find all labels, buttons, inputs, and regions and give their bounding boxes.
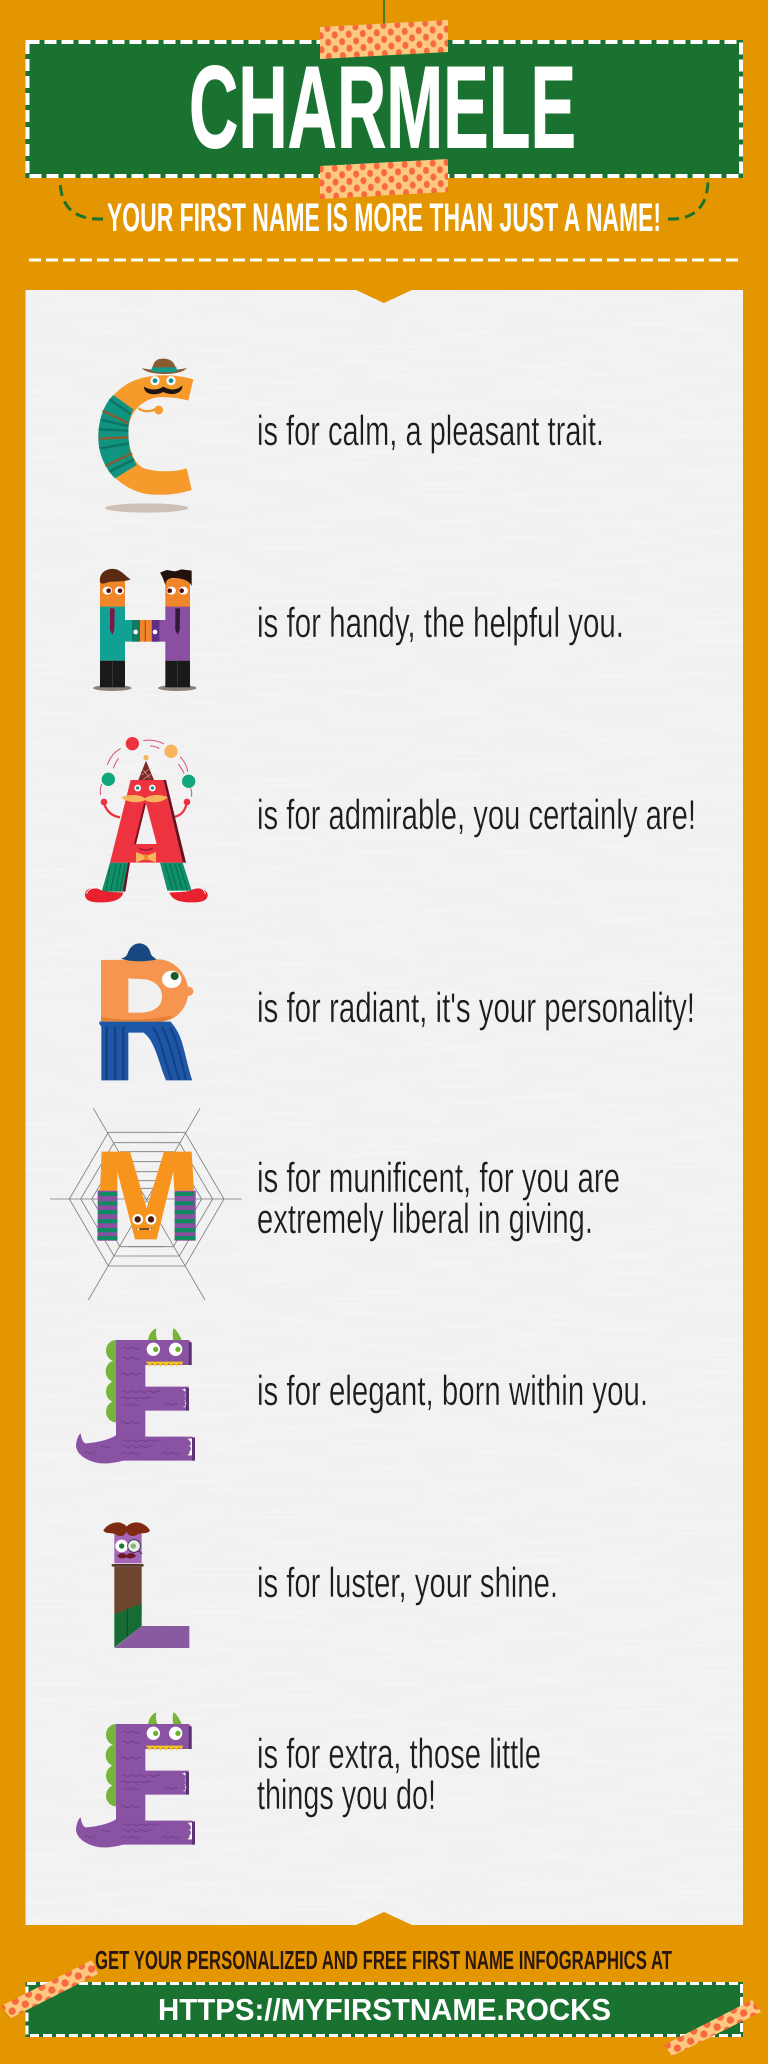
text: last E: is for extra, those little xyxy=(257,1730,541,1777)
icon: letter E purple monster xyxy=(76,1328,195,1463)
dashed curved connectors xyxy=(60,179,708,219)
text: M: extremely liberal in giving. xyxy=(257,1195,593,1242)
title banner xyxy=(26,40,743,178)
icon: letter M on spider web xyxy=(50,1108,242,1300)
text: L: is for luster, your shine. xyxy=(257,1559,558,1606)
icon: letter H two men shaking hands xyxy=(93,569,197,691)
hanging string xyxy=(383,0,385,24)
icon: letter A juggling clown xyxy=(85,737,208,902)
text: M xyxy=(257,1154,620,1242)
panel: letters xyxy=(26,290,743,1925)
text: last E: things you do! xyxy=(257,1771,436,1818)
footer tape right xyxy=(664,2000,761,2056)
icon: letter C with hat and moustache xyxy=(98,359,193,513)
icon: letter R with bowler hat xyxy=(99,943,193,1080)
lower tape xyxy=(320,159,448,199)
dashed divider xyxy=(29,258,739,262)
icon: letter L with monocle xyxy=(103,1522,189,1648)
footer URL: HTTPS://MYFIRSTNAME.ROCKS xyxy=(158,1993,611,2027)
icon: letter E purple monster (last) xyxy=(76,1712,195,1847)
footer URL banner xyxy=(26,1982,743,2037)
top tape xyxy=(320,20,448,59)
footer tape left xyxy=(1,1960,98,2018)
text: last E xyxy=(257,1730,541,1818)
text: M: is for munificent, for you are xyxy=(257,1154,620,1201)
text: C: is for calm, a pleasant trait. xyxy=(257,407,604,454)
text: H: is for handy, the helpful you. xyxy=(257,599,624,646)
